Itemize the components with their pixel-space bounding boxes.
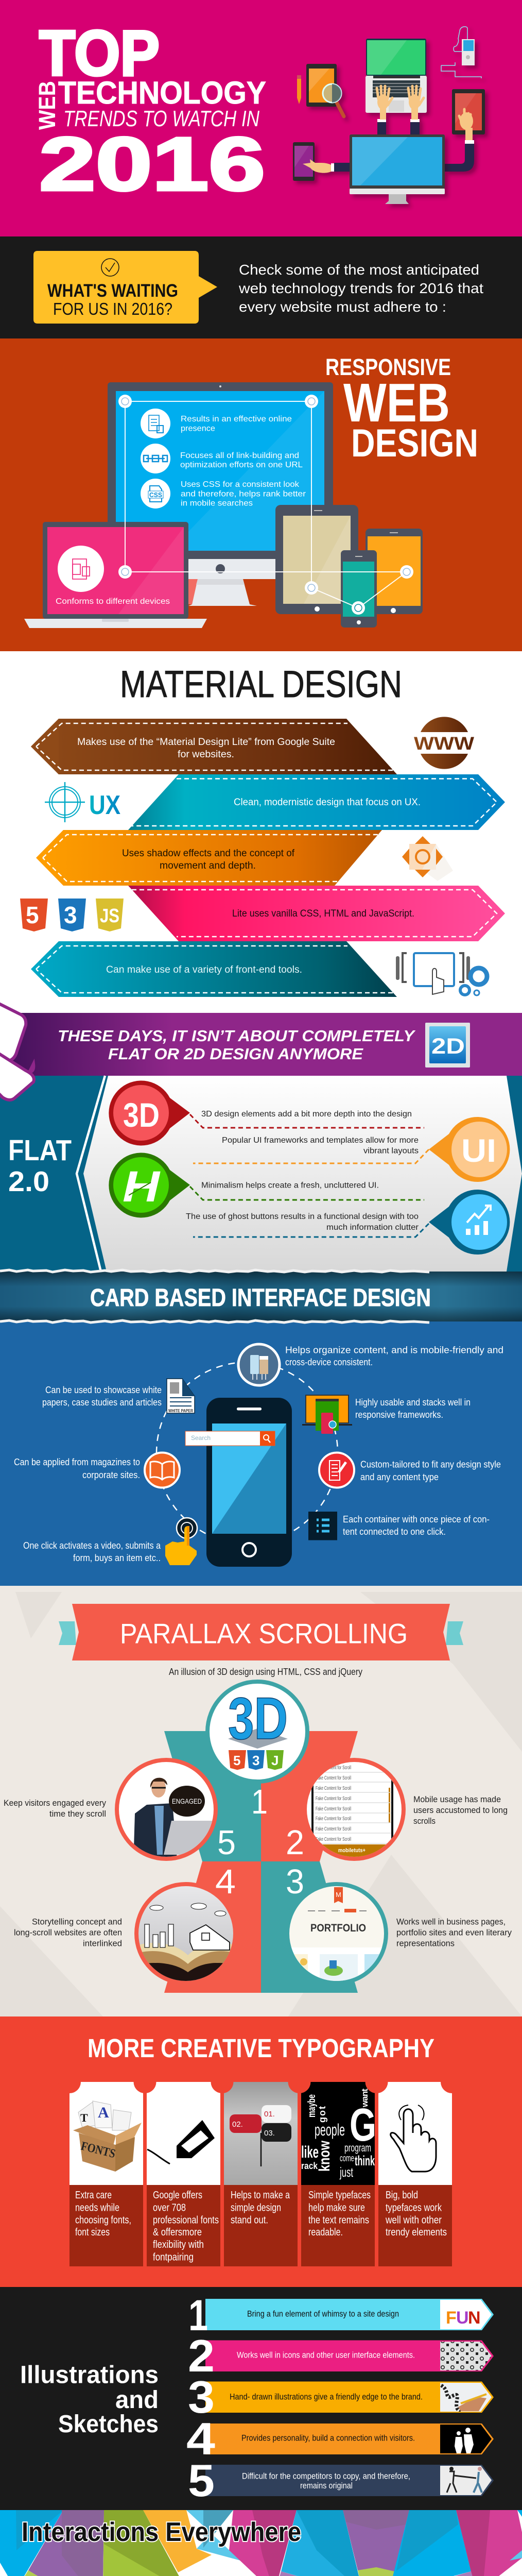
connector network [118,395,413,615]
circle: storytelling [136,1884,239,1989]
banner decoration [0,1002,33,1102]
card 2 text: Google offers [153,2190,202,2201]
hourglass numbers: 5 [217,1823,236,1862]
item: one click: One click activates a video, submits a [23,1540,161,1551]
panel: flat 2.0 [0,1051,522,1272]
laptop text: Conforms to different devices [56,597,170,606]
card 4 text: Simple typefaces [308,2190,371,2201]
ribbon 3: Uses shadow effects and the concept of [122,848,295,859]
card 2 text [147,2185,220,2266]
heading [20,2362,159,2438]
text: business pages [396,1917,512,1948]
card 3 text: stand out. [231,2215,268,2226]
benefit: css: Uses CSS for a consistent look [181,480,300,489]
circle: long scroll list: Fake Content for Scroll [316,1806,351,1812]
panel: more creative typography [0,2016,522,2287]
point: ghost buttons: The use of ghost buttons results in a functional design with too [186,1212,419,1221]
ribbon heading [59,1604,463,1660]
dashed ring [156,1362,338,1544]
text: storytelling: Storytelling concept and [32,1917,122,1927]
card 3 text: Helps to make a [231,2190,290,2201]
card 2 text: flexibility with [153,2239,204,2250]
ribbon 5 [31,941,397,997]
item: white paper: papers, case studies and articles [42,1397,162,1408]
card 1 text: choosing fonts, [75,2215,131,2226]
item: white paper [42,1379,195,1413]
icon: ux target: UX [89,790,120,820]
circle: portfolio: M [336,1891,341,1899]
card 5 text: typefaces work [386,2202,442,2213]
circle: 3d top: J [271,1753,279,1768]
word cloud: think [355,2153,375,2168]
item: custom tailored [319,1453,501,1488]
point: ui [193,1117,510,1182]
point: minimalism: Minimalism helps create a fresh, uncluttered UI. [201,1181,379,1190]
banner text: FLAT OR 2D DESIGN ANYMORE [108,1045,363,1063]
heading: Sketches [58,2411,159,2438]
icon: laptop with hands [366,39,427,135]
circle: portfolio [287,1884,386,1986]
panel: material design [0,651,522,1013]
icon: 2d tile: 2D [431,1034,465,1059]
intro text: web technology trends for 2016 that [238,280,483,296]
icon: check circle [101,259,119,276]
point: 3d: 3D [123,1096,160,1134]
item: magazines: Can be applied from magazines to [14,1457,140,1467]
heading: material design: MATERIAL DESIGN [120,664,402,705]
monitor [108,382,333,606]
circle: 3d top: 3 [252,1753,259,1768]
heading band [0,1270,522,1323]
word cloud: just [339,2164,353,2180]
item: organize: cross-device consistent. [285,1357,373,1367]
row 2: 2 [188,2330,215,2381]
item: one click: form, buys an item etc.. [73,1553,161,1563]
panel: hero [0,0,522,236]
row 1: N [468,2308,481,2328]
icon: www globe [414,717,474,769]
benefit: single URL [141,444,303,473]
banner decoration overlap [0,1051,34,1100]
card 5 text: trendy elements [386,2227,447,2238]
word cloud: come [340,2153,354,2163]
ribbon 1: Makes use of the “Material Design Lite” from Google Suite [77,737,335,748]
tablet [275,505,358,614]
small phone [341,550,377,628]
row 5: Difficult for the competitors to copy, and therefore, [242,2471,410,2481]
card scallops [51,2066,463,2093]
intro text: every website must adhere to : [239,299,446,315]
card images [69,2082,452,2185]
ribbon 3: movement and depth. [160,860,256,871]
phone [185,1398,292,1567]
word cloud: maybe [306,2094,318,2117]
row 4: 4 [186,2413,215,2464]
heading: MORE CREATIVE TYPOGRAPHY [88,2033,434,2063]
icon: music player [441,27,481,78]
card 2 text: & offersmore [153,2227,202,2238]
card 5 text [378,2185,452,2266]
callout: what's waiting [33,251,217,324]
laptop [24,522,207,628]
point: ui: Popular UI frameworks and templates allow for more [222,1136,419,1145]
card 3 text: simple design [231,2202,281,2213]
ribbon 1 [31,719,397,774]
benefit: online presence: Results in an effective online [181,415,292,423]
icon: fonts box: T [80,2111,88,2124]
origami banner [0,2510,522,2576]
title: technology: TECHNOLOGY [58,75,266,110]
card 1 text: font sizes [75,2227,110,2238]
heading: Illustrations [20,2362,159,2389]
large phone [366,529,423,614]
row 3: Hand- drawn illustrations give a friendly edge to the brand. [230,2392,423,2402]
heading: flat 2.0 [8,1134,72,1197]
row 1 [188,2291,494,2340]
circle: long scroll list: Fake Content for Scroll [316,1765,351,1771]
point: ghost buttons [186,1190,510,1255]
hourglass [164,1731,358,1993]
icon: pencil [147,2120,215,2164]
item: responsive frameworks: responsive frameworks. [355,1410,443,1420]
card 4 text: help make sure [308,2202,365,2213]
card 5 text: Big, bold [386,2190,418,2201]
ribbon 4 [128,886,505,941]
panel: card based interface design [0,1270,522,1586]
word cloud: program [344,2142,371,2154]
callout heading: WHAT'S WAITING [47,281,178,301]
icon: red tablet with hand [445,89,485,172]
icon: fonts box: A [98,2104,109,2121]
ribbon 1: for websites. [178,749,234,760]
row 4: Provides personality, build a connection with visitors. [241,2433,415,2443]
row 3 [189,2381,494,2413]
row 5 [189,2465,494,2497]
intro text [238,262,483,315]
ribbon 3 [36,830,382,886]
item: white paper: Can be used to showcase white [45,1385,162,1395]
title: 2016: 2016 [39,122,265,207]
panel: illustrations and sketches [0,2287,522,2510]
icon: fonts box [73,2101,142,2172]
circle: long scroll list: Fake Content for Scroll [316,1786,351,1791]
panel: intro [0,236,522,338]
ribbon 4: Lite uses vanilla CSS, HTML and JavaScript. [232,908,414,919]
text: storytelling: interlinked [83,1939,122,1948]
benefit: online presence [141,409,292,438]
text: mobile usage: Mobile usage has made [413,1794,501,1804]
text: mobile usage: users accustomed to long [413,1805,508,1815]
ribbon 2 [128,774,505,830]
point: minimalism [109,1153,424,1218]
icon: html css js shields: 5 [26,902,39,928]
benefit: single URL: optimization efforts on one URL [180,461,303,469]
hourglass numbers: 3 [286,1862,304,1901]
card 4 text: the text remains [308,2215,369,2226]
icon: fonts box: FONTS [80,2140,117,2161]
search bar [185,1431,275,1446]
icon: orange arrows [402,836,453,881]
benefit: online presence: presence [181,425,215,433]
panel: parallax scrolling [0,1586,522,2016]
text: business pages: Works well in business pages, [396,1917,506,1927]
row 1: F [446,2308,457,2328]
card 3 text [224,2185,298,2266]
card 2 text: professional fonts [153,2215,219,2226]
ribbon 2: Clean, modernistic design that focus on UX. [234,797,421,808]
infographic bubbles: 02. [232,2120,243,2129]
text: storytelling: long-scroll websites are often [14,1928,122,1937]
item: container: tent connected to one click. [343,1527,446,1537]
row 3: 3 [188,2371,215,2422]
ribbon 5: Can make use of a variety of front-end tools. [106,964,302,975]
item: magazines: corporate sites. [82,1470,140,1480]
word cloud: know [316,2140,333,2172]
circle: engaged: ENGAGED [172,1797,202,1805]
icon: 2d tile [425,1023,470,1067]
point: ui: UI [461,1133,496,1169]
circle: 3d top [207,1682,307,1782]
panel: interactions everywhere [0,2510,522,2576]
icon: html css js shields: 3 [64,902,77,928]
circle: engaged [117,1760,216,1865]
circle: long scroll list: Fake Content for Scroll [316,1775,351,1781]
row 4 [187,2423,494,2454]
item: custom tailored: Custom-tailored to fit any design style [360,1459,501,1469]
text: business pages: portfolio sites and even literary [396,1928,512,1937]
point: 3d [109,1081,424,1146]
word cloud: got [317,2106,327,2123]
icon: touch hand [391,2105,436,2172]
word cloud: want [360,2089,370,2108]
infographic bubbles: 03. [264,2129,275,2138]
card 1 text: Extra care [75,2190,112,2201]
circle: 3d top: 3D [228,1686,288,1752]
benefit: css: and therefore, helps rank better [181,489,306,499]
search bar: Search [191,1434,211,1442]
point: minimalism: H [123,1162,161,1211]
row 2 [188,2330,494,2381]
benefit: css: in mobile searches [181,499,253,508]
infographic bubbles [230,2105,291,2166]
icon: html css js shields [20,899,124,931]
ribbon heading: PARALLAX SCROLLING [120,1618,408,1650]
panel: purple banner [0,1002,522,1102]
row 2: Works well in icons and other user interface elements. [237,2350,415,2360]
card 4 text [301,2185,375,2266]
icon: purple phone with hand [293,142,350,181]
icon: www globe: WWW [414,734,474,754]
intro text: Check some of the most anticipated [239,262,479,278]
item: one click [23,1518,197,1565]
heading: Interactions Everywhere [22,2517,301,2547]
circle: long scroll list: Fake Content for Scroll [316,1837,351,1842]
hourglass numbers [215,1783,304,1901]
item: custom tailored: and any content type [360,1472,439,1482]
icon: ux target [45,782,120,822]
circle: long scroll list: Fake Content for Scroll [316,1816,351,1822]
circle: long scroll list [305,1760,404,1865]
icon: desktop monitor [350,134,445,204]
benefit: css [141,479,306,509]
heading: responsive web design: DESIGN [351,421,478,465]
row 5: remains original [300,2481,353,2490]
text: engaged: time they scroll [49,1809,106,1819]
heading text: CARD BASED INTERFACE DESIGN [90,1284,431,1312]
circle: 3d top: 5 [233,1753,240,1768]
title: trends to watch in: TRENDS TO WATCH IN [63,106,259,131]
panel: responsive web design [0,338,522,651]
title: top: TOP [39,18,160,89]
card 1 text [69,2185,143,2266]
row 1: Bring a fun element of whimsy to a site design [247,2309,399,2319]
item: container: Each container with once piece of con- [343,1514,490,1524]
icon: devices [58,546,104,592]
hourglass numbers: 4 [215,1862,236,1901]
text: mobile usage: scrolls [413,1816,436,1826]
infographic bubbles: 01. [264,2110,275,2119]
text: storytelling [14,1917,122,1948]
row 5: 5 [188,2455,215,2506]
item: organize [238,1344,503,1385]
word cloud [301,2089,376,2180]
card 2 text: over 708 [153,2202,186,2213]
card 5 text: well with other [385,2215,442,2226]
word cloud: like [301,2143,319,2161]
word cloud: G [350,2099,376,2151]
heading: responsive web design [325,354,478,465]
icon: orange tablet and magnifier [306,64,344,116]
circle: long scroll list: mobiletuts+ [338,1848,366,1854]
point: ui: vibrant layouts [363,1147,419,1156]
banner text [58,1027,416,1063]
icon: pencil [297,75,301,104]
word cloud: rack [301,2161,318,2171]
item: responsive frameworks: Highly usable and stacks well in [355,1397,471,1408]
title: web vertical: WEB [34,81,60,130]
card 1 text: needs while [75,2202,119,2213]
row 1: U [456,2308,469,2328]
row 1: 1 [188,2291,208,2340]
benefit: css: CSS [149,491,162,499]
point: ghost buttons: much information clutter [326,1223,419,1232]
circle: long scroll list: Fake Content for Scroll [316,1796,351,1802]
banner text: THESE DAYS, IT ISN’T ABOUT COMPLETELY [58,1027,416,1045]
callout subheading: FOR US IN 2016? [53,299,172,318]
icon: interface tools [396,953,487,995]
heading: responsive web design: RESPONSIVE [325,354,451,380]
item: organize: Helps organize content, and is mobile-friendly and [285,1345,503,1355]
heading: and [115,2386,159,2414]
circle: portfolio: PORTFOLIO [310,1922,366,1934]
point: 3d: 3D design elements add a bit more depth into the design [201,1110,412,1118]
heading: flat 2.0: FLAT [8,1134,72,1167]
hourglass numbers: 1 [251,1783,268,1821]
text: engaged [4,1798,106,1819]
heading: responsive web design: WEB [343,372,450,433]
text: business pages: representations [396,1939,455,1948]
circle: long scroll list: Fake Content for Scroll [316,1826,351,1832]
item: container [308,1512,490,1540]
icon: html css js shields: JS [100,905,119,927]
subtitle: An illusion of 3D design using HTML, CSS and jQuery [169,1667,362,1677]
text: engaged: Keep visitors engaged every [4,1798,106,1808]
text: mobile usage [413,1794,508,1826]
card 4 text: readable. [308,2227,343,2238]
item: white paper: WHITE PAPER [168,1409,193,1413]
card 2 text: fontpairing [153,2251,194,2263]
benefit: single URL: Focuses all of link-building and [180,451,299,460]
hourglass numbers: 2 [286,1823,304,1862]
word cloud: people [315,2121,345,2139]
heading: flat 2.0: 2.0 [8,1165,49,1197]
item: responsive frameworks [302,1395,471,1434]
item: magazines [14,1453,180,1488]
